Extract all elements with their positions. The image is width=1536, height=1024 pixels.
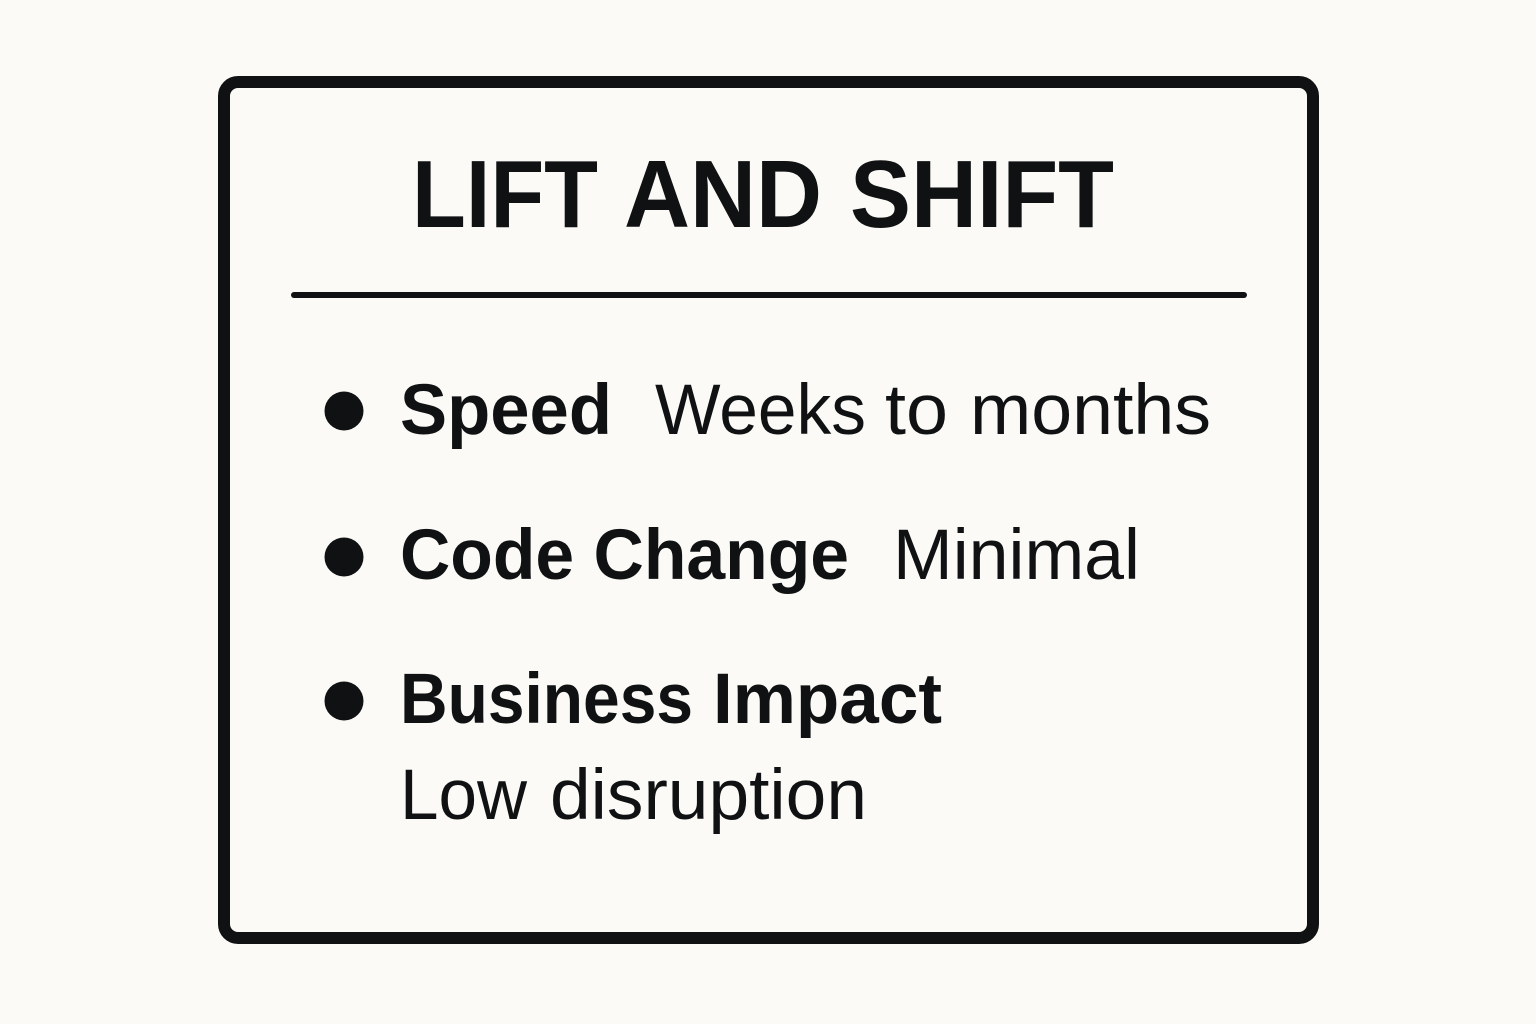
title: AND: [624, 141, 822, 248]
bullet: speed: Speed: [400, 371, 612, 450]
bullet: business impact: Impact: [713, 660, 942, 739]
bullet: business impact: disruption: [550, 756, 867, 835]
panel: lift and shift card: [224, 82, 1313, 938]
bullet: speed: months: [970, 371, 1211, 450]
title: [412, 141, 1114, 248]
bullet: speed: to: [885, 371, 948, 450]
bullet: business impact: Business: [400, 660, 693, 739]
bullet: code change: Code Change: [400, 516, 849, 595]
title: LIFT: [412, 141, 598, 248]
bullet: speed: [324, 371, 1211, 450]
bullet: code change: Minimal: [893, 516, 1140, 595]
bullet: business impact: Low: [400, 756, 528, 835]
bullet: business impact: [324, 660, 942, 835]
bullet: speed: Weeks: [655, 371, 866, 450]
bullet: code change: [324, 516, 1140, 595]
title: SHIFT: [850, 141, 1114, 248]
